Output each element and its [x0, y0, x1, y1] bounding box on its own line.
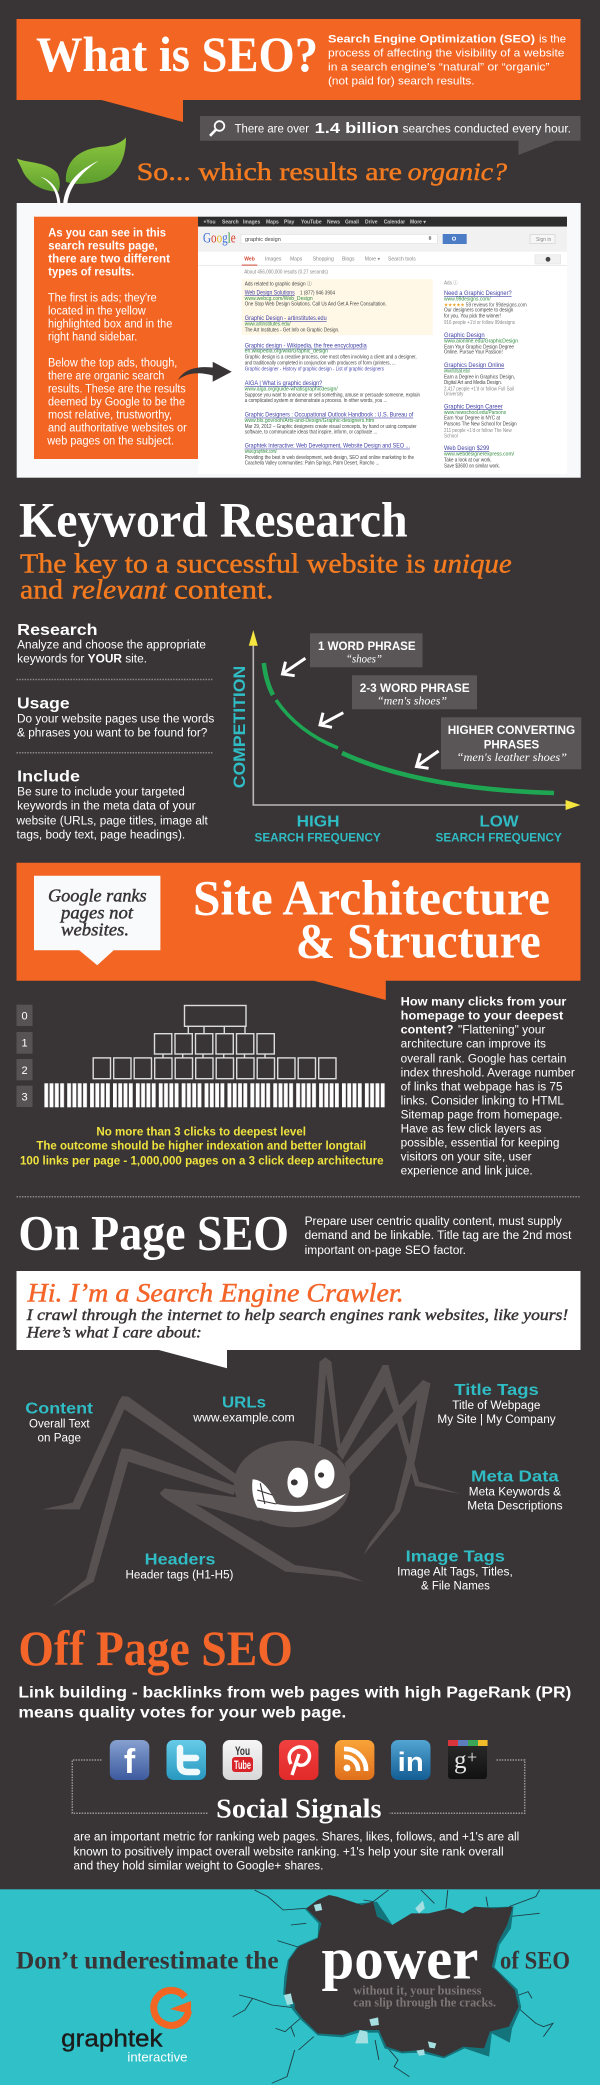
label: image tags: & File Names [421, 1581, 490, 1593]
label: content: on Page [38, 1433, 81, 1445]
icon: youtube: Tube [234, 1758, 251, 1772]
screenshot: google results page: en.wikipedia.org/wiki/Graphic_design [245, 349, 328, 355]
label: higher converting phrases: “men's leather shoes” [457, 750, 567, 764]
text block: click depth rules [20, 1127, 384, 1168]
panel: footer power of SEO [0, 1889, 600, 2085]
sidebar ads: www.fullsail.edu/ [444, 368, 470, 374]
text block: how many clicks [401, 997, 575, 1178]
text block: SEO definition [328, 34, 566, 88]
screenshot: google results page: Providing the best in web development, web design, SEO and online marketing to the [245, 455, 414, 461]
sidebar ads: for you. You pick the winner! [444, 314, 501, 320]
panel: search results screenshot [17, 203, 581, 478]
screenshot: google results page: Maps [266, 220, 279, 226]
screenshot: google results page: software, to communicate ideas that inspire, inform, or captivate ... [245, 430, 377, 436]
panel: site architecture header [16, 863, 580, 1000]
text block: how many clicks: Have as few click layers as [401, 1124, 542, 1136]
label: meta data [467, 1468, 563, 1513]
sidebar ads: Graphic Design [444, 333, 485, 339]
callout: search engine crawler speech bubble: I crawl through the internet to help search engines rank websites, like yours! [26, 1307, 568, 1324]
sidebar ads: Graphics Design Online [444, 363, 505, 369]
text block: usage: Do your website pages use the words [17, 714, 215, 726]
subheading: key to successful website: relevant [72, 575, 168, 605]
panel: orange explanation box: there are two different [48, 254, 170, 266]
callout: google ranks pages [34, 876, 160, 965]
sidebar ads: www.99designs.com/ [444, 297, 491, 303]
callout: searches per hour: There are over [235, 124, 309, 136]
icon: rss [335, 1740, 374, 1780]
text: power: power [322, 1925, 478, 1991]
label: title tags: Title Tags [454, 1382, 539, 1399]
arrow: curved pointer to results [178, 362, 232, 382]
screenshot: google results page: Graphic design - Wikipedia, the free encyclopedia [245, 344, 367, 350]
panel: orange explanation box: Below the top ads, though, [48, 357, 177, 369]
label: 2-3 word phrase: “men's shoes” [377, 694, 447, 708]
text block: SEO definition: is the [539, 34, 566, 46]
icon: pinterest [279, 1740, 318, 1780]
axis label: high search frequency: HIGH [297, 814, 340, 831]
label: image tags [397, 1549, 513, 1593]
spider face [252, 1459, 346, 1512]
logo: graphtek interactive [61, 1990, 191, 2065]
text block: how many clicks: How many clicks from your [401, 997, 567, 1009]
text block: research [17, 622, 206, 666]
logo: graphtek interactive: graphtek [61, 2026, 164, 2053]
screenshot: google results page: Graphic Designers : Occupational Outlook Handbook : U.S. Bureau of [245, 413, 414, 419]
text: without it [353, 1982, 496, 2010]
heading: which results are organic: organic? [408, 159, 508, 186]
screenshot: google results page: 1 (877) 946 3904 [300, 290, 335, 296]
label: meta data: Meta Descriptions [467, 1501, 563, 1513]
sidebar ads: Online. Pursue Your Passion! [444, 350, 503, 356]
label: image tags: Image Alt Tags, Titles, [397, 1567, 513, 1579]
callout: google ranks pages: pages not [59, 902, 134, 922]
text block: SEO definition: Search Engine Optimization (SEO) [328, 34, 535, 46]
text block: SEO definition: (not paid for) search results. [328, 76, 474, 88]
screenshot: google results page: Search [222, 220, 239, 226]
text block: how many clicks: experience and link juice. [401, 1166, 533, 1178]
screenshot: google results page: More ▾ [365, 257, 380, 263]
callout: searches per hour [200, 116, 580, 155]
panel: orange explanation box: and authoritative websites or [48, 422, 187, 434]
screenshot: google results page: www.webcg.com/Web_Design [245, 296, 313, 302]
label: title tags: Title of Webpage [452, 1400, 540, 1412]
text block: include: Include [17, 769, 80, 786]
text block: how many clicks: visitors on your site, user [401, 1152, 532, 1164]
text: without it: can slip through the cracks. [353, 1995, 496, 2010]
screenshot: google results page: graphic design [245, 237, 281, 243]
label: content [25, 1400, 93, 1445]
screenshot: google results page: www.aiga.org/guide-whatisgraphicdesign/ [245, 387, 338, 393]
panel: orange explanation box: types of results. [48, 267, 134, 279]
screenshot: google results page: One Stop Web Design Solutions. Call Us And Get A Free Consultation. [245, 301, 387, 307]
subheading: key to successful website [20, 549, 512, 605]
screenshot: google results page: Graphic design is a creative process, one most often involving a client and a designer, [245, 355, 417, 361]
callout: google ranks pages: Google ranks [48, 886, 147, 906]
sidebar ads: Ads ⓘ [444, 279, 458, 286]
label: URLs [192, 1394, 295, 1425]
text block: how many clicks: overall rank. Google has certain [401, 1053, 566, 1065]
panel: what is SEO header [16, 19, 580, 122]
heading: site architecture and structure [193, 869, 550, 968]
heading: on page SEO: On Page SEO [18, 1204, 289, 1260]
dotted frame: social signals [72, 1760, 525, 1813]
label: content: Content [25, 1400, 93, 1417]
level markers: 0 [21, 1011, 28, 1023]
panel: orange explanation box: web pages on the subject. [46, 435, 174, 447]
screenshot: google results page: Images [265, 257, 282, 263]
text block: usage: & phrases you want to be found for? [17, 728, 207, 740]
text block: how many clicks: homepage to your deepest [401, 1011, 563, 1023]
icon: facebook: f [124, 1743, 136, 1781]
panel: orange explanation box: As you can see in this [48, 228, 166, 240]
text block: on page intro [305, 1216, 572, 1257]
heading: which results are organic: So... which results are [137, 159, 402, 186]
screenshot: google results page: Graphtek Interactive: Web Development, Website Design and SEO ... [245, 444, 410, 450]
sidebar ads: Parsons The New School for Design [444, 422, 517, 428]
screenshot: google results page: The Art Institutes - Get Info on Graphic Design. [245, 327, 339, 333]
screenshot: google results page: and traditionally completed in conjunction with producers of form (printers, ... [245, 360, 396, 366]
text block: how many clicks: content? [401, 1025, 454, 1037]
icon: twitter [166, 1740, 206, 1780]
label: URLs: URLs [222, 1394, 266, 1411]
panel: orange explanation box: right hand sidebar. [48, 331, 137, 343]
sidebar ads [444, 279, 527, 469]
text block: how many clicks: Sitemap page from homepage. [401, 1110, 563, 1122]
sidebar ads: School [444, 433, 458, 439]
chart: competition vs search frequency [230, 630, 581, 845]
screenshot: google results page: Search tools [388, 257, 416, 263]
text block: click depth rules: 100 links per page - 1,000,000 pages on a 3 click deep architecture [20, 1156, 384, 1168]
callout: searches per hour: 1.4 billion [315, 120, 399, 137]
screenshot: google results page: Sign in [536, 237, 552, 243]
panel: orange explanation box: deemed by Google to be the [48, 396, 185, 408]
text block: how many clicks: index threshold. Average number [401, 1068, 575, 1080]
illustration: spider [42, 1357, 461, 1607]
label: higher converting phrases [441, 717, 581, 769]
panel: orange explanation box: located in the yellow [48, 305, 146, 317]
screenshot: google results page: Graphic Design - artinstitutes.edu [245, 316, 327, 322]
text block: how many clicks: architecture can improve its [401, 1039, 546, 1051]
panel: keyword research [15, 492, 581, 845]
heading: site architecture and structure: & Structure [296, 912, 541, 968]
label: content: Overall Text [29, 1419, 90, 1431]
label: higher converting phrases: HIGHER CONVERTING [448, 723, 575, 737]
label: headers: Header tags (H1-H5) [126, 1570, 234, 1582]
label: image tags: Image Tags [406, 1549, 505, 1566]
axis label: high search frequency: SEARCH FREQUENCY [254, 831, 381, 845]
label: 1 word phrase [310, 633, 422, 667]
text block: on page intro: Prepare user centric quality content, must supply [305, 1216, 562, 1228]
screenshot: google results page [198, 217, 567, 474]
axis label: high search frequency [254, 814, 381, 845]
text block: how many clicks: "Flattening" your [458, 1025, 545, 1037]
text: don't underestimate the: Don’t underestimate the [16, 1947, 279, 1974]
heading: site architecture and structure: Site Architecture [193, 869, 550, 925]
level markers: 2 [21, 1065, 28, 1077]
icon: youtube [223, 1740, 262, 1780]
arrows: pointing at curve [282, 658, 439, 768]
text block: how many clicks: of links that webpage has is 75 [401, 1082, 563, 1094]
chart: competition vs search frequency: COMPETITION [230, 666, 249, 788]
label: 1 word phrase: “shoes” [346, 652, 382, 666]
callout: search engine crawler speech bubble: Hi. I’m a Search Engine Crawler. [26, 1279, 404, 1308]
screenshot: google results page: More ▾ [410, 220, 426, 226]
axis label: low search frequency [436, 814, 562, 845]
sidebar ads: Earn Your Graphic Design Degree [444, 345, 514, 351]
text block: include: website (URLs, page titles, image alt [15, 815, 209, 827]
text block: how many clicks: possible, essential for keeping [401, 1138, 560, 1150]
text block: click depth rules: The outcome should be higher indexation and better longtail [36, 1141, 366, 1153]
label: headers: Headers [145, 1551, 216, 1568]
axis label: low search frequency: LOW [480, 814, 520, 831]
heading: which results are organic [137, 159, 508, 186]
text block: research: keywords for YOUR site. [17, 654, 147, 666]
text: of SEO: of SEO [500, 1947, 570, 1974]
logo: google: Google [203, 230, 236, 246]
text block: social signals: known to positively impact overall website ranking. +1's help your site rank overall [74, 1847, 504, 1859]
callout: google ranks pages: websites. [61, 920, 129, 940]
text block: link building: Link building - backlinks from web pages with high PageRank (PR) [18, 1685, 571, 1702]
callout: searches per hour: searches conducted every hour. [403, 124, 571, 136]
icon: facebook [110, 1740, 149, 1781]
label: title tags [437, 1382, 556, 1426]
sidebar ads: ★★★★★ 59 reviews for 99designs.com [444, 302, 527, 308]
panel: orange explanation box: results. These are the results [48, 383, 186, 395]
text block: include: Be sure to include your targeted [17, 787, 185, 799]
logo: graphtek interactive: interactive [127, 2050, 188, 2065]
screenshot: google results page: a complicated system or demonstrate a process. In other words, you ... [245, 398, 387, 404]
text: without it: without it, your business [353, 1982, 481, 1997]
sidebar ads: University [444, 392, 464, 398]
screenshot: google results page: Blogs [342, 257, 355, 263]
screenshot: google results page: Web Design Solutions [245, 290, 295, 296]
subheading: key to successful website: and [20, 575, 64, 605]
sidebar ads: Need a Graphic Designer? [444, 291, 512, 297]
chart: click depth tree [16, 1005, 385, 1107]
screenshot: google results page: Maps [290, 257, 303, 263]
callout: search engine crawler speech bubble [16, 1271, 580, 1368]
screenshot: google results page: News [327, 220, 340, 226]
screenshot: google results page: YouTube [301, 220, 322, 226]
icon: linkedin [391, 1740, 430, 1780]
text block: click depth rules: No more than 3 clicks to deepest level [96, 1127, 306, 1139]
level markers: 3 [21, 1092, 28, 1104]
sidebar ads: 2,417 people +1'd or follow Full Sail [444, 386, 514, 392]
sidebar ads: Earn Your Degree in NYC at [444, 416, 501, 422]
text block: social signals: are an important metric for ranking web pages. Shares, likes, follows, and +1's are all [74, 1832, 519, 1844]
screenshot: google results page: Gmail [345, 220, 360, 226]
sidebar ads: Graphic Design Career [444, 404, 503, 410]
screenshot: google results page: Coachella Valley communities: Palm Springs, Palm Desert, Rancho ... [245, 460, 379, 466]
text block: on page intro: demand and be linkable. Title tag are the 2nd most [305, 1230, 572, 1242]
screenshot: google results page: www.bls.gov/ooh/Arts-and-Design/Graphic-designers.htm [245, 418, 374, 424]
text block: usage: Usage [17, 695, 70, 712]
label: 2-3 word phrase: 2-3 WORD PHRASE [360, 681, 470, 695]
screenshot: google results page: Play [284, 220, 295, 226]
sidebar ads: www.newschool.edu/Parsons [444, 410, 506, 416]
level 3 bars [44, 1083, 385, 1107]
panel: orange explanation box [34, 217, 198, 459]
heading: off page SEO: Off Page SEO [18, 1620, 293, 1676]
panel: orange explanation box: highlighted box and in the [48, 318, 172, 330]
panel: orange explanation box: there are organic search [48, 370, 164, 382]
screenshot: google results page: +You [204, 220, 216, 226]
text block: link building: means quality votes for your web page. [18, 1705, 346, 1722]
sidebar ads: Digital Art and Media Design. [444, 380, 502, 386]
sidebar ads: Save $3600 on similar work. [444, 463, 500, 469]
icon: google plus: + [467, 1747, 477, 1767]
icon: linkedin: in [398, 1747, 424, 1777]
text block: link building [18, 1685, 571, 1722]
panel: orange explanation box: The first is ads; they're [48, 292, 157, 304]
text block: SEO definition: in a search engine's “natural” or “organic” [328, 62, 550, 74]
icon: youtube: You [235, 1744, 250, 1758]
level markers [16, 1005, 32, 1107]
screenshot: google results page: Calendar [384, 220, 405, 226]
icon: google plus: g [454, 1747, 467, 1774]
callout: search engine crawler speech bubble: Here’s what I care about: [26, 1325, 202, 1342]
sidebar ads: 916 people +1'd or follow 99designs [444, 320, 515, 326]
level markers: 1 [21, 1038, 28, 1050]
screenshot: google results page: Web [244, 257, 255, 263]
sidebar ads: www.webdesignerexpress.com/ [444, 452, 515, 458]
subheading: key to successful website: content. [174, 575, 274, 605]
screenshot: google results page: Graphic designer - History of graphic design - List of graphic designers [245, 367, 384, 373]
title: what is SEO: What is SEO? [36, 26, 318, 82]
sidebar ads: www.aionline.edu/GraphicDesign [444, 339, 518, 345]
screenshot: google results page: Mar 29, 2012 – Graphic designers create visual concepts, by hand or using computer [245, 424, 417, 430]
sidebar ads: Take a look at our work. [444, 458, 492, 464]
text block: how many clicks: links. Consider linking to HTML [401, 1096, 565, 1108]
screenshot: google results page: AIGA | What is graphic design? [245, 381, 323, 387]
text block: include [15, 769, 209, 841]
text block: include: keywords in the meta data of your [17, 801, 196, 813]
screenshot: google results page: About 456,000,000 results (0.27 seconds) [244, 269, 328, 275]
screenshot: google results page: Drive [365, 220, 378, 226]
text block: SEO definition: process of affecting the visibility of a website [328, 48, 564, 60]
axis label: low search frequency: SEARCH FREQUENCY [436, 831, 562, 845]
text block: usage [17, 695, 215, 740]
text block: research: Analyze and choose the appropriate [17, 640, 206, 652]
label: higher converting phrases: PHRASES [484, 737, 539, 751]
text block: research: Research [17, 622, 98, 639]
tree boxes [93, 1006, 336, 1079]
screenshot: google results page: Shopping [313, 257, 334, 263]
subheading: key to successful website: The key to a successful website is [20, 549, 426, 579]
heading: keyword research: Keyword Research [19, 492, 408, 548]
label: 1 word phrase: 1 WORD PHRASE [318, 639, 416, 653]
text block: on page intro: important on-page SEO factor. [305, 1245, 466, 1257]
label: URLs: www.example.com [192, 1413, 295, 1425]
text block: social signals [74, 1832, 519, 1873]
icons: social networks [110, 1740, 488, 1781]
text block: include: tags, body text, page headings). [16, 829, 185, 841]
text block: social signals: and they hold similar weight to Google+ shares. [74, 1861, 323, 1873]
subheading: key to successful website: unique [433, 549, 512, 579]
sidebar ads: Web Design $299 [444, 446, 490, 452]
heading: social signals: Social Signals [216, 1793, 382, 1823]
icon: green leaves [17, 137, 126, 204]
screenshot: google results page: www.graphtek.com/ [245, 449, 277, 455]
label: meta data: Meta Keywords & [469, 1487, 561, 1499]
screenshot: google results page: www.artinstitutes.edu/ [245, 322, 291, 328]
illustration: cracked wall hole [233, 1890, 553, 2083]
sidebar ads: 211 people +1'd or follow The New [444, 428, 512, 434]
panel: orange explanation box: search results page, [48, 241, 158, 253]
sidebar ads: Earn a Degree in Graphics Design, [444, 375, 515, 381]
screenshot: google results page: Images [243, 220, 260, 226]
label: meta data: Meta Data [471, 1468, 559, 1485]
icon: magnifier [210, 121, 224, 136]
screenshot: google results page: Ads related to graphic design ⓘ [245, 280, 312, 287]
sidebar ads: Our designers compete to design [444, 308, 514, 314]
screenshot: google results page: Suppose you want to announce or sell something, amuse or persuade someone, explain [245, 392, 420, 398]
label: title tags: My Site | My Company [437, 1414, 556, 1426]
label: 2-3 word phrase [352, 675, 477, 709]
icon: google plus [448, 1740, 488, 1779]
panel: orange explanation box: most relative, trustworthy, [48, 409, 172, 421]
label: headers [126, 1551, 234, 1582]
